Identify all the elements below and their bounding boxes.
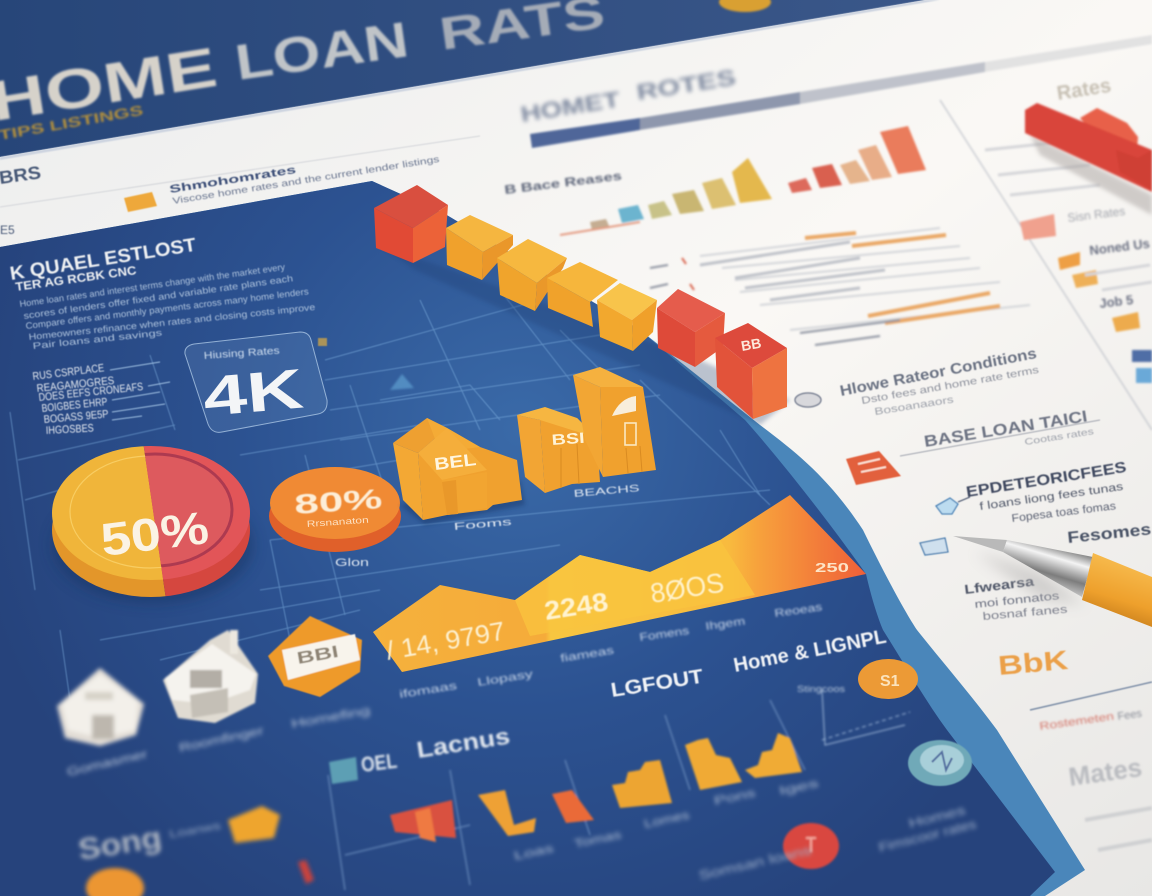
ribbon axis labels: Reoeas [774, 601, 824, 620]
small line chart: lower right: Stingcoos [797, 684, 846, 694]
note 2: Cootas rates [1024, 426, 1095, 447]
callout: 4K glass card: 4K [201, 356, 306, 428]
note 3 [936, 459, 1128, 525]
cube row [374, 185, 790, 425]
heading: lower section [329, 723, 512, 784]
text: bottom left blurred: Song [76, 821, 164, 867]
icon: red disc [783, 823, 839, 869]
line list: horizontal rates [650, 228, 1030, 345]
sub-heading: chart title: B Bace Reases [504, 169, 623, 197]
note 3: Fopesa toas fomas [1011, 500, 1117, 525]
blueprint grid [10, 290, 770, 700]
header title: LOAN [232, 11, 412, 91]
note 3: f loans liong fees tunas [979, 481, 1125, 513]
icon: orange house [268, 616, 362, 697]
left strip under header [0, 136, 480, 237]
cube: yellow 4 [547, 262, 618, 327]
heading: Lgfout: LGFOUT [609, 666, 705, 702]
note 4: bosnaf fanes [982, 604, 1069, 623]
left strip under header: Shmohomrates [169, 164, 297, 196]
text block: panel paragraph: Compare offers and monthly payments across many home lenders [25, 286, 310, 331]
note 6: footer lines: Rostemeten [1039, 711, 1115, 733]
heading: lower section: OEL [360, 750, 398, 777]
house captions: Roomfinger [178, 723, 265, 755]
block caption: BEACHS [573, 483, 641, 500]
badge: orange circle: S1 [880, 673, 900, 690]
ribbon axis labels: fiameas [560, 645, 615, 665]
text block: panel paragraph: Homeowners refinance when rates and closing costs improve [28, 302, 316, 342]
coin: 80%: Rrsnanaton [306, 515, 369, 529]
3D house: yellow [393, 418, 525, 533]
panel: white report top [504, 35, 1152, 430]
note 5: bbk figure [997, 645, 1152, 710]
left strip under header: E5 [0, 223, 15, 237]
sidebar: right column [940, 75, 1152, 430]
note 1 [795, 345, 1040, 418]
cube: red 7 [715, 323, 787, 419]
text: bottom right blurred: Fimscoor rates [877, 816, 978, 855]
text: bottom left blurred [76, 806, 314, 896]
note 6: footer lines: Fees [1117, 708, 1143, 723]
text block: panel paragraph [19, 262, 316, 351]
heading: lower section: Lacnus [415, 723, 512, 763]
heading: Home & Legal [609, 626, 888, 702]
cube: red 1 [374, 185, 448, 263]
small line chart: lower right [797, 684, 910, 745]
header title [0, 0, 771, 143]
ribbon axis labels: Llopasy [477, 668, 534, 689]
text block: small list [32, 362, 170, 437]
text block: small list: BOGASS 9E5P [43, 408, 109, 426]
sidebar: right column: Noned Us [1089, 236, 1151, 258]
heading: panel title: TER AG RCBK CNC [14, 263, 138, 294]
ribbon axis labels: Fomens [639, 625, 691, 644]
text: bottom right blurred [697, 802, 978, 883]
donut value: 50% [98, 501, 211, 566]
heading: panel title: K QUAEL ESTLOST [8, 235, 198, 285]
bar chart: rates [560, 126, 926, 235]
text block: small list: REAGAMOGRES [36, 375, 115, 395]
chart captions: Loas [513, 841, 555, 863]
sidebar: right column: Job 5 [1099, 292, 1134, 311]
header bar [530, 35, 1152, 148]
panel: blue main sheet [0, 181, 1085, 896]
note 5: bbk figure: BbK [997, 645, 1070, 681]
text block: small list: DOES EEFS CRONEAFS [38, 381, 144, 404]
ribbon area chart: 2248 [542, 586, 610, 626]
house captions [66, 703, 371, 779]
text block: small list: RUS CSRPLACE [32, 362, 105, 383]
note 6: footer lines: Mates [1067, 752, 1144, 792]
coin caption: Glon [335, 557, 369, 569]
cube shadow [380, 245, 790, 425]
cube: yellow 2 [446, 215, 513, 280]
callout: 4K glass card: Hiusing Rates [203, 346, 280, 362]
text: bottom right blurred: Somsan loans [697, 842, 813, 883]
cube: yellow 3 [497, 239, 567, 311]
icon: white house 1 [57, 668, 144, 746]
note 4: moi fonnatos [974, 590, 1061, 611]
3D house: yellow: BEL [433, 450, 477, 474]
text block: small list: BOIGBES EHRP [41, 396, 108, 415]
cube: red 7: BB [740, 335, 762, 354]
header title: TIPS LISTINGS [0, 102, 144, 143]
sidebar: right column: Sisn Rates [1067, 204, 1126, 225]
text block: panel paragraph: Pair loans and savings [32, 327, 163, 351]
note 4: Lfwearsa [964, 573, 1036, 597]
text: bottom right blurred: Homes [907, 802, 968, 831]
icon: orange house: BBI [295, 642, 340, 668]
text blocks: report notes [795, 345, 1152, 850]
cube: red 6 [657, 289, 725, 367]
note 1: Bosoanaaors [874, 395, 954, 418]
note 1: Hlowe Rateor Conditions [839, 345, 1038, 400]
chart captions [513, 776, 820, 863]
ribbon axis labels [399, 601, 824, 701]
marker: red top right [1025, 103, 1152, 215]
text block: small list: IHGOSBES [46, 423, 94, 437]
note 4 [920, 521, 1152, 623]
coin: 80% [269, 467, 401, 569]
text block: panel paragraph: Home loan rates and interest terms change with the market every [19, 262, 286, 309]
note 1: Dsto fees and home rate terms [861, 365, 1040, 407]
ribbon axis labels: ifomaas [399, 680, 458, 701]
icon: white house 2 [163, 630, 258, 723]
ribbon area chart: 250 [815, 560, 849, 575]
house captions: Gomasmer [66, 747, 149, 779]
chart captions: Iges [778, 776, 820, 798]
ribbon area chart [373, 495, 866, 672]
house caption: Fooms [453, 517, 512, 533]
house captions: Homefing [290, 703, 371, 731]
note 3: EPDETEORICFEES [965, 459, 1128, 501]
chart captions: Tomas [573, 827, 623, 851]
icon: teal disc [908, 740, 972, 786]
cube: yellow 5 [597, 283, 657, 351]
coin: 80%: 80% [293, 483, 383, 520]
badge: orange circle [858, 659, 918, 699]
note 2 [846, 408, 1100, 485]
3D building: mid block [517, 407, 641, 500]
ribbon axis labels: Ihgem [705, 616, 746, 633]
left strip under header: Viscose home rates and the current lender listings [172, 154, 441, 206]
sidebar: right column: Rates [1055, 75, 1113, 105]
heading: Home Rates: ROTES [635, 65, 738, 105]
heading: Home Rates [519, 65, 738, 127]
3D building: mid block: BSI [551, 430, 585, 449]
donut coin: 50% [52, 446, 253, 603]
ribbon area chart: / 14, 9797 [384, 616, 507, 666]
bar charts: lower row [328, 700, 805, 890]
chart captions: Pons [713, 786, 757, 808]
heading: Home & Legal: Home & LIGNPL [732, 626, 888, 677]
callout: 4K glass card [185, 332, 327, 432]
note 6: footer lines [1039, 708, 1152, 850]
note 2: BASE LOAN TAICI [923, 408, 1089, 451]
text block: panel paragraph: scores of lenders offer fixed and variable rate plans each [23, 273, 294, 321]
ribbon area chart: 8ØOS [648, 567, 726, 609]
chart captions: Lomes [643, 808, 691, 831]
heading: Home Rates: HOMET [519, 86, 622, 127]
icon: pen [953, 536, 1152, 627]
text: bottom left blurred: Loanws [168, 820, 222, 841]
top header band [0, 0, 940, 160]
note 4: Fesomes [1067, 521, 1152, 547]
3D building: tall block [573, 367, 656, 477]
